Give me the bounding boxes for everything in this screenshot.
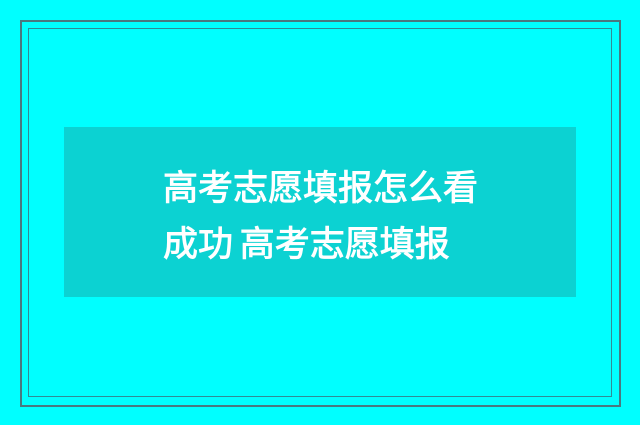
title text <box>163 169 478 264</box>
title text: 高考志愿填报怎么看 <box>163 169 478 208</box>
inner frame <box>28 28 612 397</box>
title text: 成功 高考志愿填报 <box>163 225 450 264</box>
title panel <box>64 127 576 297</box>
